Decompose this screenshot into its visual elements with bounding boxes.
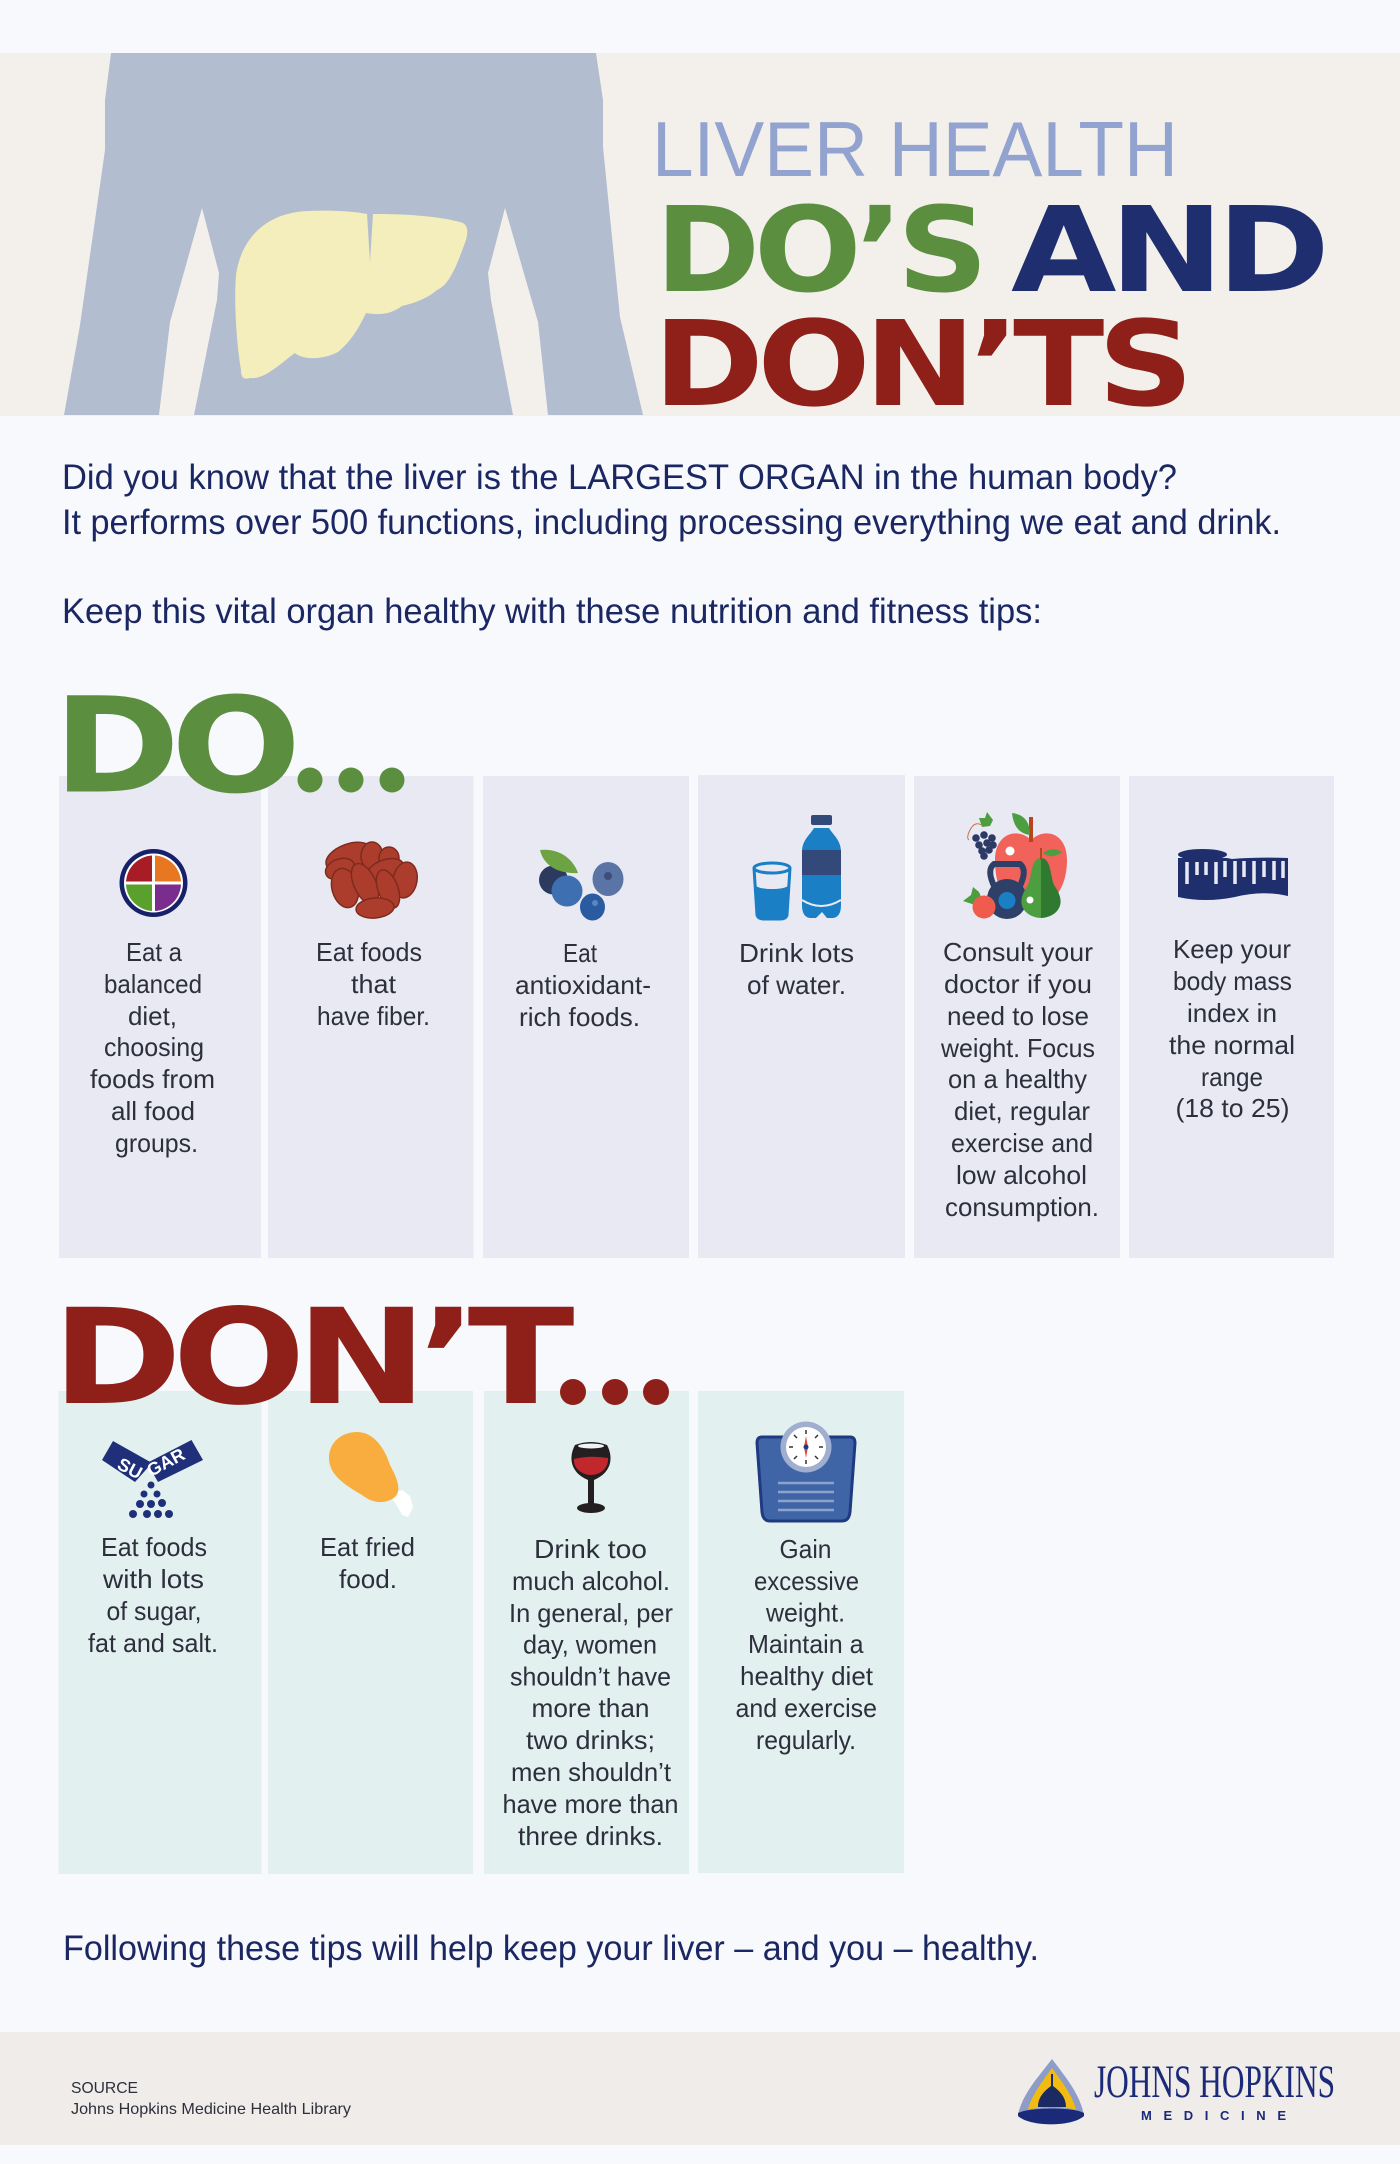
- icon: blueberries: [539, 850, 624, 920]
- card text: on a healthy: [948, 1064, 1087, 1094]
- title line: liver health: LIVER HEALTH: [652, 105, 1178, 193]
- card text: range: [1201, 1062, 1263, 1092]
- card text: [736, 1534, 877, 1755]
- card text: [1169, 934, 1295, 1123]
- card text: foods from: [90, 1064, 215, 1094]
- icon: water glass and bottle: [754, 815, 841, 919]
- intro text: Keep this vital organ healthy with these nutrition and fitness tips:: [62, 592, 1042, 631]
- card text: excessive: [754, 1566, 859, 1596]
- icon: measuring tape: [1178, 849, 1288, 900]
- intro text: It performs over 500 functions, including processing everything we eat and drink.: [62, 503, 1281, 542]
- icon: sugar packets: [102, 1440, 203, 1518]
- footer band: [0, 2032, 1400, 2145]
- card text: healthy diet: [740, 1661, 874, 1691]
- card text: that: [351, 969, 397, 999]
- card text: [739, 938, 854, 1000]
- panel: do card 1 balanced diet: [59, 776, 261, 1258]
- title word: and: AND: [1011, 181, 1323, 319]
- panel: dont card 3 alcohol: [484, 1391, 689, 1874]
- panel: dont card 1 sugar: [58, 1391, 262, 1874]
- icon: sugar packets: SU: [114, 1454, 146, 1483]
- card text: diet, regular: [954, 1096, 1090, 1126]
- panel: dont card 4 weight: [698, 1391, 904, 1873]
- card text: [940, 937, 1099, 1222]
- card text: [320, 1532, 415, 1594]
- card text: low alcohol: [956, 1160, 1087, 1190]
- card text: groups.: [115, 1128, 198, 1158]
- icon: food plate: [120, 849, 188, 917]
- card text: Drink lots: [739, 938, 854, 968]
- card text: Eat a: [126, 937, 182, 967]
- source note: [71, 2080, 351, 2118]
- card text: Gain: [780, 1534, 832, 1564]
- card text: Eat: [563, 938, 598, 968]
- card text: two drinks;: [526, 1725, 655, 1755]
- source note: Johns Hopkins Medicine Health Library: [71, 2101, 351, 2118]
- card text: (18 to 25): [1176, 1093, 1290, 1123]
- card text: choosing: [104, 1032, 204, 1062]
- panel: do card 2 fiber: [268, 776, 474, 1258]
- intro text: [62, 458, 1281, 631]
- card text: weight. Focus: [940, 1033, 1095, 1063]
- card text: rich foods.: [519, 1002, 640, 1032]
- title word: don'ts: DON’TS: [653, 295, 1187, 433]
- header band: [0, 53, 1400, 433]
- card text: [88, 1532, 218, 1658]
- card text: of sugar,: [106, 1596, 202, 1626]
- card text: [90, 937, 215, 1158]
- card text: much alcohol.: [512, 1566, 670, 1596]
- card text: of water.: [747, 970, 846, 1000]
- card text: index in: [1187, 998, 1277, 1028]
- heading: do: [53, 670, 404, 824]
- card text: shouldn’t have: [510, 1662, 671, 1692]
- card text: [316, 937, 430, 1031]
- card text: Consult your: [943, 937, 1093, 967]
- card text: with lots: [102, 1564, 204, 1594]
- card text: all food: [111, 1096, 195, 1126]
- panel: do card 5 weight: [914, 776, 1120, 1258]
- panel: do card 6 bmi: [1129, 776, 1334, 1258]
- icon: fruit and kettlebell: [963, 812, 1067, 919]
- card text: day, women: [523, 1630, 657, 1660]
- card text: need to lose: [947, 1001, 1089, 1031]
- card text: body mass: [1173, 966, 1292, 996]
- card text: In general, per: [509, 1598, 673, 1628]
- card text: the normal: [1169, 1030, 1295, 1060]
- panel: do card 3 antioxidants: [483, 776, 689, 1258]
- card text: weight.: [765, 1598, 845, 1628]
- card text: have fiber.: [317, 1001, 430, 1031]
- card text: and exercise: [736, 1693, 877, 1723]
- icon: sugar packets: GAR: [143, 1444, 188, 1481]
- panel: dont card 2 fried food: [268, 1391, 473, 1874]
- card text: doctor if you: [944, 969, 1092, 999]
- logo: johns hopkins medicine: [1018, 2056, 1335, 2124]
- icon: wine glass: [571, 1442, 611, 1513]
- card text: [502, 1534, 678, 1851]
- card text: antioxidant-: [515, 970, 651, 1000]
- icon: bathroom scale: [757, 1422, 855, 1521]
- card text: exercise and: [951, 1128, 1093, 1158]
- closing line: Following these tips will help keep your liver – and you – healthy.: [63, 1929, 1039, 1968]
- card text: have more than: [502, 1789, 678, 1819]
- card text: balanced: [104, 969, 202, 999]
- intro text: Did you know that the liver is the LARGEST ORGAN in the human body?: [62, 458, 1177, 497]
- card text: food.: [339, 1564, 397, 1594]
- card text: Eat foods: [316, 937, 422, 967]
- heading: dont: DON’T: [52, 1281, 574, 1435]
- illustration: torso silhouette: [64, 53, 643, 415]
- card text: Maintain a: [748, 1629, 864, 1659]
- icon: chicken drumstick: [329, 1432, 413, 1517]
- panel: do card 4 water: [698, 775, 905, 1258]
- card text: more than: [532, 1693, 650, 1723]
- card text: consumption.: [945, 1192, 1099, 1222]
- card text: men shouldn’t: [511, 1757, 672, 1787]
- title: [652, 105, 1323, 433]
- card text: Keep your: [1173, 934, 1291, 964]
- card text: fat and salt.: [88, 1628, 218, 1658]
- card text: Eat fried: [320, 1532, 415, 1562]
- illustration: liver: [235, 211, 467, 379]
- card text: three drinks.: [518, 1821, 663, 1851]
- card text: [515, 938, 651, 1032]
- title word: do's: DO’S: [655, 181, 982, 319]
- card text: diet,: [128, 1001, 177, 1031]
- card text: Eat foods: [101, 1532, 207, 1562]
- card text: regularly.: [756, 1725, 856, 1755]
- heading: do: DO: [53, 670, 294, 824]
- logo: johns hopkins medicine: MEDICINE: [1141, 2108, 1286, 2123]
- icon: kidney beans: [322, 837, 420, 920]
- card text: Drink too: [534, 1534, 647, 1564]
- source note: SOURCE: [71, 2080, 138, 2097]
